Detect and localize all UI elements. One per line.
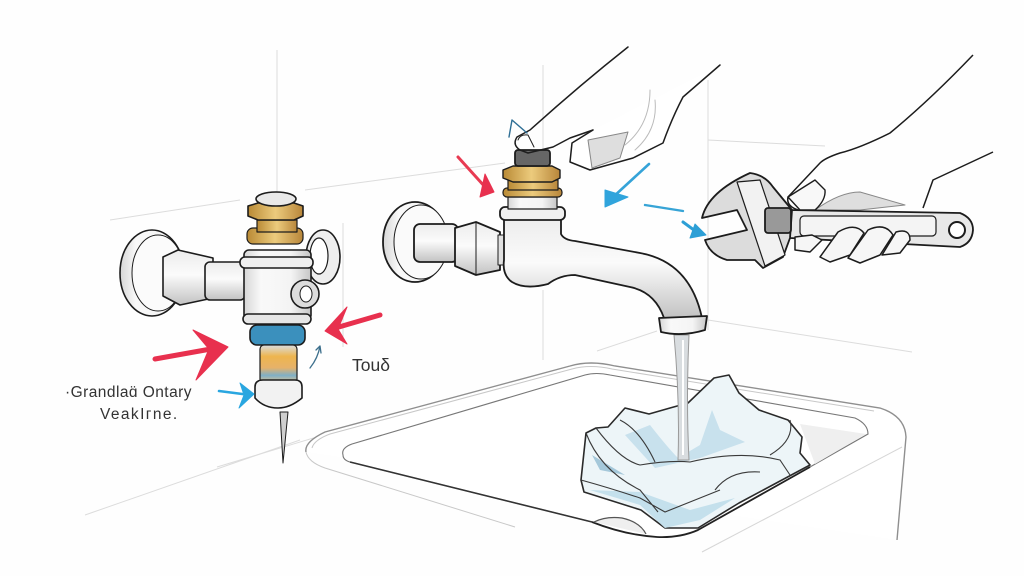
towel folds	[581, 420, 791, 512]
dark blue scribble	[509, 120, 527, 137]
blue dash	[645, 205, 683, 211]
wrench handle	[788, 210, 973, 247]
spout tip collar	[659, 316, 707, 334]
red arrow: brass nut	[458, 157, 494, 197]
brass cap	[247, 203, 303, 244]
valve collar	[240, 257, 313, 268]
valve body	[244, 250, 311, 320]
sink outer rim	[306, 363, 906, 540]
valve nut and pipe	[163, 250, 245, 305]
red arrow: right	[325, 307, 380, 344]
faucet arrows	[458, 120, 706, 238]
exploded valve	[120, 192, 340, 463]
neck	[508, 197, 557, 209]
sink	[306, 363, 906, 552]
fingers	[795, 227, 910, 263]
hand on faucet	[515, 47, 720, 170]
valve side ring	[306, 230, 340, 284]
wrench hole	[949, 222, 965, 238]
towel body	[581, 375, 810, 528]
blue arrow: bottom nut	[219, 383, 254, 408]
sink basin	[343, 374, 868, 537]
worm screw	[765, 208, 791, 233]
side knob	[291, 280, 319, 308]
label: left caption	[65, 384, 192, 423]
wrench and hand	[702, 55, 993, 268]
needle	[280, 412, 288, 463]
spout	[504, 218, 702, 318]
small dark arrow	[310, 346, 321, 368]
blue arrow: faucet top	[605, 164, 649, 207]
wall tile lines	[85, 50, 912, 515]
black stem	[515, 150, 550, 166]
towel	[581, 375, 810, 528]
faucet	[383, 150, 707, 334]
thumb	[788, 180, 825, 210]
wrench head	[702, 173, 792, 268]
drain	[594, 518, 646, 534]
wrench slot	[800, 216, 936, 236]
brass threads	[503, 166, 562, 197]
valve top cap	[256, 192, 296, 206]
bottom nut	[255, 380, 302, 408]
cartridge	[260, 345, 297, 383]
blue seal	[250, 325, 305, 345]
wall flange	[383, 202, 448, 282]
red arrow: left	[155, 330, 228, 380]
label: left caption: VeakIᴦne.	[100, 406, 179, 423]
towel shading	[625, 410, 745, 468]
valve arrows	[155, 307, 380, 408]
hand arm	[788, 55, 993, 210]
supply pipe and nut	[414, 222, 506, 275]
collar	[500, 207, 565, 220]
small blue arrow: wrench jaw	[683, 222, 706, 238]
water stream	[674, 335, 689, 460]
label: touch: Touδ	[352, 355, 390, 375]
label: left caption: ·Grandlaɑ̈ Ontary	[65, 384, 192, 401]
valve flange	[120, 230, 184, 316]
hand palm shading	[815, 192, 905, 210]
